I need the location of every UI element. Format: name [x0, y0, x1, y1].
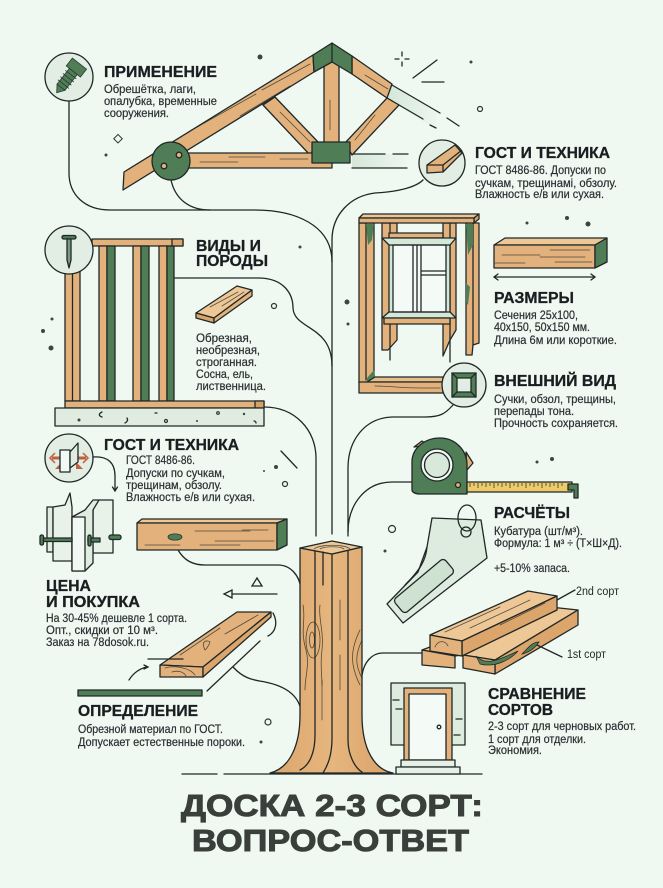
panel: long beam with knot — [137, 519, 287, 550]
body text — [104, 84, 217, 120]
body text — [46, 613, 187, 649]
body text — [494, 394, 618, 430]
icon: clamp assembly — [40, 493, 121, 571]
left post — [359, 223, 374, 383]
right rafter — [352, 56, 392, 98]
body text: строганная. — [196, 357, 257, 369]
icon: plank with grain — [129, 612, 276, 691]
heading: РАЗМЕРЫ — [494, 290, 574, 307]
heading: ГОСТ И ТЕХНИКА — [475, 145, 610, 162]
body text: опалубка, временные — [104, 96, 217, 108]
body text — [475, 165, 617, 201]
ground line — [182, 773, 482, 775]
body text: +5-10% запаса. — [494, 563, 570, 575]
green center plate — [312, 142, 350, 163]
concrete foundation — [55, 408, 264, 426]
left knot — [303, 605, 322, 690]
title: ВОПРОС-ОТВЕТ — [192, 823, 469, 858]
icon: door — [391, 683, 465, 774]
body text: 1 сорт для отделки. — [488, 734, 586, 746]
green apex plate — [313, 43, 352, 74]
body text: Допускает естественные пороки. — [78, 737, 245, 749]
lower left beam — [422, 647, 462, 668]
heading: СОРТОВ — [488, 702, 553, 719]
heading: И ПОКУПКА — [46, 594, 140, 611]
panel: внешний вид — [442, 363, 618, 430]
body text: Кубатура (шт/м³). — [494, 526, 583, 538]
icon: timber end in circle — [419, 140, 465, 186]
panel: виды и породы — [45, 226, 268, 426]
window — [382, 233, 456, 324]
label: 2nd sort: 2nd сорт — [576, 586, 620, 598]
body text: Обрезной материал по ГОСТ. — [78, 724, 223, 736]
heading: ВНЕШНИЙ ВИД — [494, 372, 616, 390]
icon: tag note — [387, 505, 487, 623]
body text: Длина 6м или короткие. — [494, 335, 617, 347]
body text: перепады тона. — [494, 406, 574, 418]
panel: расчёты — [387, 438, 622, 623]
panel: timber stack — [422, 586, 620, 674]
body text: Сосна, ель, — [196, 369, 253, 381]
body text: Сечения 25х100, — [494, 310, 578, 322]
icon: triangle and arrow — [224, 578, 277, 598]
title: ДОСКА 2-3 СОРТ: — [181, 788, 483, 823]
panel: определение — [78, 703, 245, 749]
heading — [46, 578, 140, 611]
icon: tape measure — [412, 438, 578, 498]
body text — [494, 310, 617, 347]
heading — [196, 238, 268, 270]
body text: На 30-45% дешевле 1 сорта. — [46, 613, 187, 625]
panel: размеры — [494, 238, 617, 347]
body text: ГОСТ 8486-86. Допуски по — [475, 165, 606, 177]
heading — [488, 686, 586, 719]
body text: Формула: 1 м³ ÷ (Т×Ш×Д). — [494, 538, 622, 550]
body text — [196, 333, 266, 393]
body text — [78, 724, 245, 749]
wall frame — [65, 239, 264, 408]
body text: сучкам, трещинамі, обзолу. — [475, 178, 617, 190]
right knot — [352, 630, 362, 685]
body text: Экономия. — [488, 745, 542, 757]
left rafter — [123, 55, 314, 190]
heading: РАСЧЁТЫ — [494, 505, 570, 522]
title — [181, 788, 483, 858]
body text — [488, 721, 636, 757]
panel: гост и техника top — [419, 140, 617, 201]
body text: Влажность е/в или сухая. — [126, 492, 255, 504]
upper beam — [430, 591, 557, 656]
body text: трещинам, обзолу. — [126, 480, 222, 492]
body text: 40х150, 50х150 мм. — [494, 322, 590, 334]
label: 2nd sort — [557, 586, 620, 600]
heading: ЦЕНА — [46, 578, 91, 595]
icon: clamp in circle — [45, 434, 93, 482]
body text: Допуски по сучкам, — [126, 468, 225, 480]
body text: 2-3 сорт для черновых работ. — [488, 721, 636, 733]
heading: ВИДЫ И — [196, 238, 261, 255]
bottom chord — [175, 153, 332, 168]
body text: ГОСТ 8486-86. — [126, 455, 195, 467]
body text: лиственница. — [196, 381, 266, 393]
icon: plank — [196, 286, 252, 323]
bottom beam — [359, 377, 443, 393]
icon: bolt — [45, 53, 93, 101]
body text — [494, 526, 622, 575]
king post — [324, 60, 339, 150]
label: 1st sort: 1st сорт — [567, 649, 607, 661]
panel: сравнение сортов — [391, 683, 636, 774]
icon: square section — [442, 363, 486, 407]
heading: ОПРЕДЕЛЕНИЕ — [78, 703, 198, 720]
panel: цена и покупка — [46, 578, 187, 649]
heading: ПРИМЕНЕНИЕ — [104, 64, 217, 81]
green joint circle — [152, 142, 190, 180]
body text: Обрешётка, лаги, — [104, 84, 196, 96]
body text: Заказ на 78dosok.ru. — [46, 637, 149, 649]
heading: ГОСТ И ТЕХНИКА — [104, 437, 239, 454]
body text — [126, 455, 255, 504]
body text: Прочность сохраняется. — [494, 418, 618, 430]
body text: Обрезная, — [196, 333, 252, 345]
panel: применение — [45, 53, 217, 120]
left strut — [263, 97, 318, 155]
tree trunk — [270, 541, 393, 773]
icon: nail — [45, 226, 93, 274]
head beam — [359, 214, 479, 223]
lower right beam — [463, 607, 578, 674]
body text: Сучки, обзол, трещины, — [494, 394, 616, 406]
arrow — [93, 457, 118, 491]
heading: СРАВНЕНИЕ — [488, 686, 586, 703]
heading: ПОРОДЫ — [196, 253, 268, 270]
right post — [466, 223, 479, 355]
panel: roof truss — [123, 43, 459, 190]
body text: Влажность е/в или сухая. — [475, 189, 604, 201]
body text: Опт., скидки от 10 м³. — [46, 625, 158, 637]
dimension arrow — [494, 274, 595, 280]
green board — [78, 690, 202, 696]
body text: сооружения. — [104, 108, 169, 120]
inner posts — [382, 223, 397, 350]
panel: гост и техника lower — [40, 434, 255, 571]
label: 1st sort — [537, 645, 607, 661]
decorative sparks and dots — [41, 52, 590, 744]
connector lines: tree branches — [69, 101, 453, 710]
fading right truss lines — [352, 85, 459, 168]
panel: window frame — [359, 214, 479, 393]
icon: beam — [494, 238, 607, 268]
right strut — [345, 98, 399, 155]
body text: необрезная, — [196, 345, 260, 357]
